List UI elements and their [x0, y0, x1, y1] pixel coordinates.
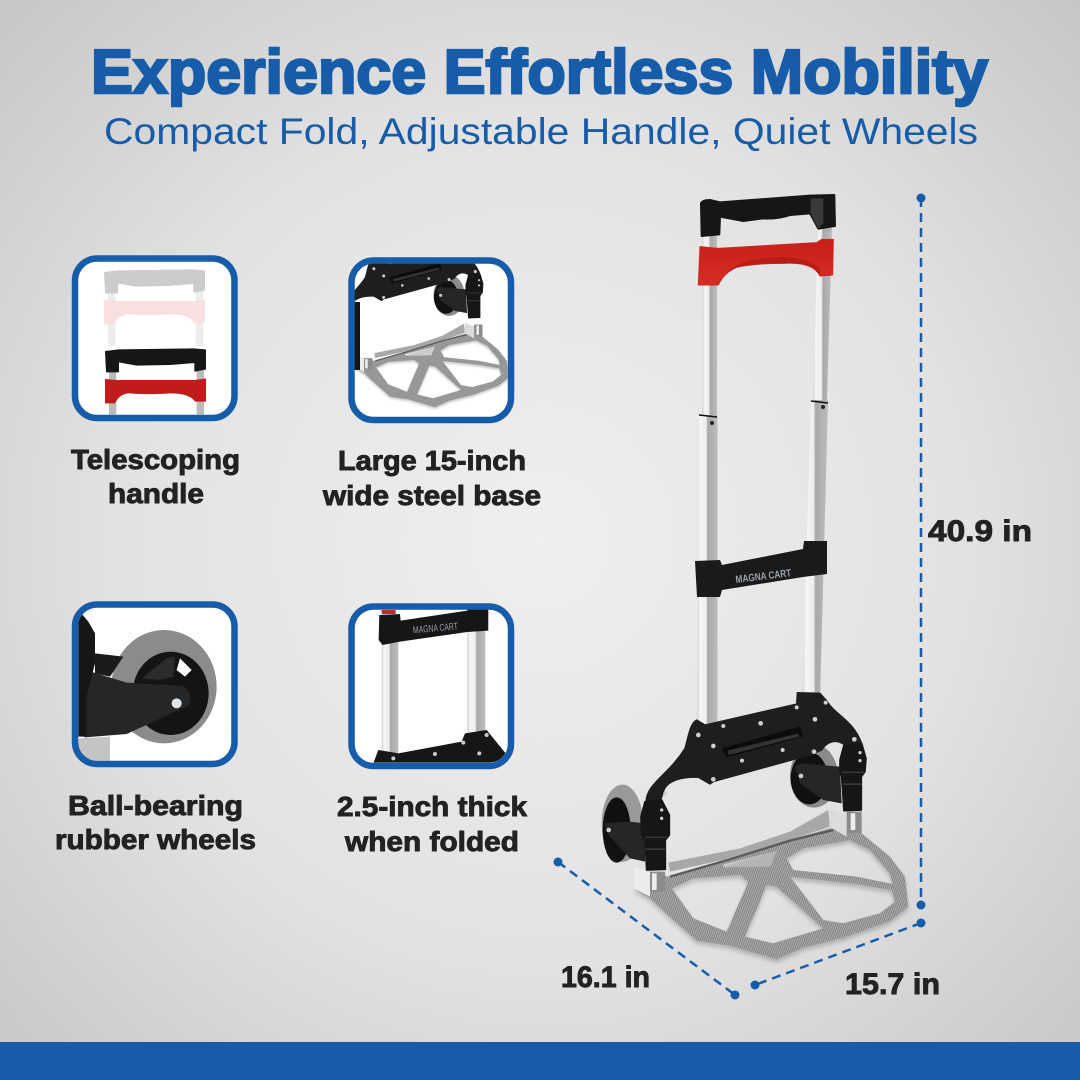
- caption: folded thickness: when folded: [344, 826, 519, 857]
- caption: rubber wheels: Ball-bearing: [68, 790, 243, 821]
- frame and wheels: [602, 693, 866, 870]
- thumbnail: rubber wheels: [75, 604, 234, 764]
- hand truck product image: [602, 195, 908, 963]
- middle bracket with logo: MAGNA CART: [735, 567, 792, 586]
- caption: folded thickness: 2.5-inch thick: [337, 791, 527, 822]
- thumbnail: telescoping handle: [75, 258, 234, 420]
- dimension: height: 40.9 in: [928, 515, 1032, 548]
- dimension: width: [750, 918, 940, 1001]
- caption: steel base: Large 15-inch: [338, 445, 526, 476]
- caption: telescoping handle: Telescoping: [71, 444, 240, 475]
- feature: steel base: [322, 257, 540, 506]
- caption: folded thickness: [337, 791, 527, 857]
- feature: rubber wheels: [55, 604, 256, 855]
- caption: telescoping handle: handle: [108, 478, 204, 509]
- handle grips: [698, 195, 835, 285]
- telescoping poles: [697, 228, 832, 725]
- middle bracket with logo: [695, 541, 827, 597]
- dimension: depth: 16.1 in: [561, 961, 650, 994]
- thumbnail: steel base: [348, 257, 514, 424]
- dimension: depth: [554, 858, 740, 1000]
- caption: rubber wheels: [55, 790, 256, 855]
- subtitle: Compact Fold, Adjustable Handle, Quiet Wheels: [104, 111, 978, 152]
- caption: steel base: wide steel base: [322, 480, 541, 511]
- feature: telescoping handle: [71, 258, 240, 509]
- caption: steel base: [322, 445, 541, 511]
- dimension: width: 15.7 in: [845, 968, 940, 1001]
- caption: telescoping handle: [71, 444, 240, 509]
- base plate: [633, 808, 908, 963]
- thumbnail: folded thickness: MAGNA CART: [413, 621, 458, 636]
- thumbnail: folded thickness: [352, 606, 511, 766]
- title: Experience Effortless Mobility: [91, 38, 989, 107]
- feature: folded thickness: [337, 606, 527, 857]
- footer bar: [0, 1042, 1080, 1080]
- caption: rubber wheels: rubber wheels: [55, 824, 256, 855]
- dimension: height: [916, 194, 1032, 910]
